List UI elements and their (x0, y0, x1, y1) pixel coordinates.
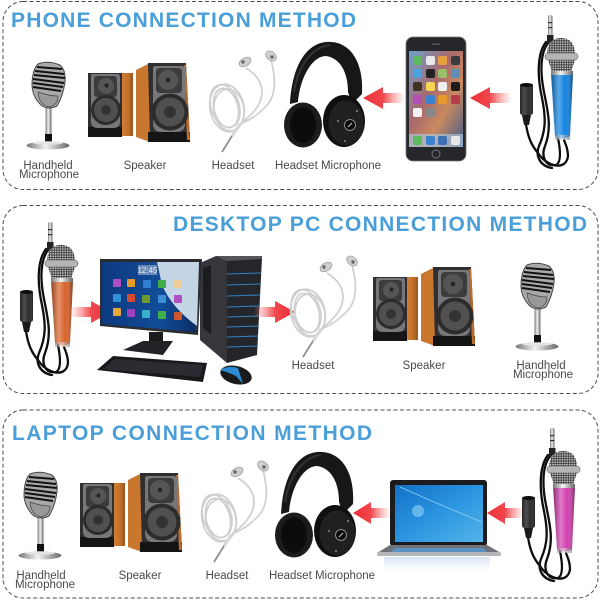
icon: studio microphone (516, 263, 558, 350)
label: headset: Headset (206, 570, 249, 582)
label: handheld microphone: Handheld (23, 160, 73, 172)
label: headset: Headset (212, 160, 255, 172)
arrow: computer to headset (255, 301, 295, 323)
panel: desktop pc connection method (3, 206, 598, 394)
arrow: microphone to computer (71, 301, 111, 323)
icon: headphones (284, 42, 365, 148)
label: headset microphone: Headset Microphone (269, 570, 375, 582)
panel: laptop connection method (3, 410, 598, 598)
icon: speakers (373, 267, 475, 346)
label: speaker: Speaker (403, 360, 446, 372)
label: handheld microphone: Handheld (16, 570, 66, 582)
heading: phone connection method: PHONE CONNECTION METHOD (11, 9, 356, 32)
icon: studio microphone (26, 62, 70, 150)
icon: earphones (197, 459, 270, 562)
label: handheld microphone: Microphone (15, 579, 75, 591)
arrow: microphone to phone (470, 87, 510, 109)
icon: earphones (205, 49, 278, 152)
icon: pink mini microphone (522, 428, 580, 581)
tower (200, 256, 227, 363)
arrow: laptop to headphones (353, 502, 389, 524)
heading: laptop connection method: LAPTOP CONNECTION METHOD (12, 422, 372, 445)
arrow: microphone to laptop (487, 502, 523, 524)
icon: headphones (275, 452, 356, 558)
icon: smartphone (406, 37, 466, 161)
panel: phone connection method (3, 2, 598, 190)
icon: blue mini microphone (520, 14, 578, 168)
icon: desktop computer: 12:45 (137, 266, 158, 275)
icon: speakers (80, 473, 182, 552)
keyboard (97, 356, 207, 382)
label: headset microphone: Headset Microphone (275, 160, 381, 172)
label: handheld microphone: Microphone (513, 369, 573, 381)
monitor (100, 259, 202, 335)
icon: orange mini microphone (20, 222, 78, 375)
monitor stand (149, 332, 163, 344)
label: speaker: Speaker (119, 570, 162, 582)
arrow: phone to headphones (363, 87, 403, 109)
label: headset: Headset (292, 360, 335, 372)
mouse (218, 362, 254, 388)
icon: earphones (286, 254, 359, 357)
heading: desktop pc connection method: DESKTOP PC CONNECTION METHOD (173, 213, 587, 236)
icon: laptop (377, 480, 501, 577)
icon: desktop computer (97, 256, 262, 388)
label: handheld microphone: Microphone (19, 169, 79, 181)
label: speaker: Speaker (124, 160, 167, 172)
label: handheld microphone: Handheld (516, 360, 566, 372)
icon: studio microphone (18, 472, 62, 560)
icon: speakers (88, 63, 190, 142)
